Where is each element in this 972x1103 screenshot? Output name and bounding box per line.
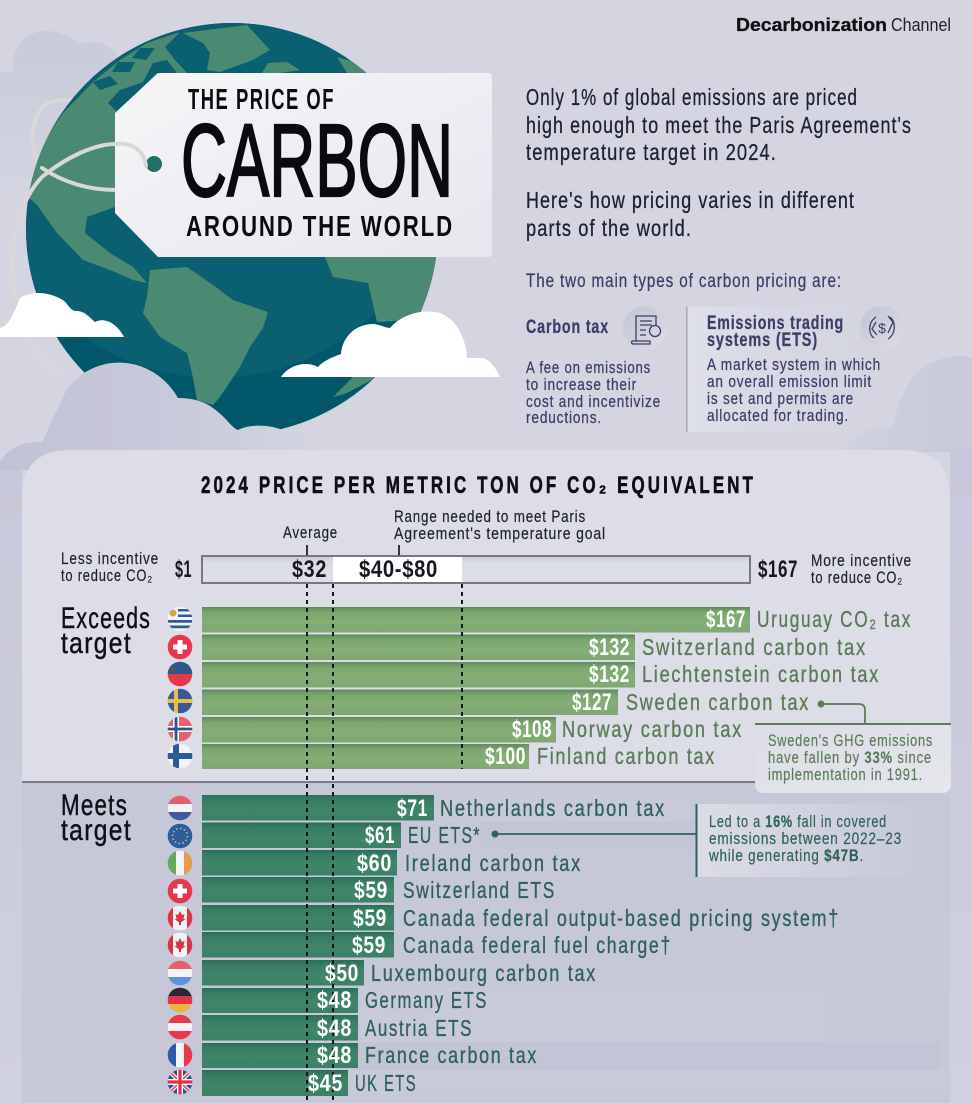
tag hole — [146, 156, 162, 172]
scale bar: to reduce CO₂ — [61, 567, 153, 585]
scale bar: More incentive — [811, 552, 912, 570]
labels: meets target: Switzerland ETS — [403, 877, 556, 903]
callout: EU ETS — [492, 804, 911, 877]
section label: exceeds target: Exceeds — [61, 602, 151, 635]
labels: meets target: EU ETS* — [408, 822, 481, 848]
labels: meets target: Canada federal output-based pricing system† — [403, 905, 840, 931]
scale bar: $167 — [758, 556, 798, 583]
scale bar: $1 — [175, 556, 192, 583]
icon: exchange cycle — [860, 306, 904, 350]
values: exceeds target: $132 — [589, 634, 630, 661]
callout: EU ETS: while generating $47B. — [708, 847, 864, 865]
brand logo: Channel — [891, 15, 951, 35]
land: greenland — [183, 25, 270, 72]
labels: meets target — [355, 795, 840, 1096]
labels: meets target: Canada federal fuel charge† — [403, 932, 672, 958]
brand logo: Decarbonization — [736, 15, 887, 35]
intro text: Only 1% of global emissions are priced — [526, 84, 858, 110]
chart panel — [22, 450, 950, 1103]
land: south america — [143, 267, 268, 405]
labels: exceeds target: Uruguay CO₂ tax — [757, 606, 912, 632]
scale annotations: Range needed to meet Paris — [394, 508, 586, 526]
labels: exceeds target: Switzerland carbon tax — [642, 634, 867, 660]
scale bar: $40-$80 — [359, 556, 438, 583]
scale bar: to reduce CO₂ — [811, 569, 903, 587]
values: meets target — [308, 795, 428, 1097]
section label: exceeds target — [61, 602, 151, 660]
flag: Ireland — [167, 850, 193, 876]
intro text: Here's how pricing varies in different — [526, 187, 855, 213]
flag: Sweden — [167, 688, 193, 714]
scale annotations — [283, 508, 606, 556]
flag: Norway — [167, 716, 193, 742]
flag: Canada — [167, 932, 193, 958]
flag: Canada — [167, 905, 193, 931]
flag: Switzerland — [167, 634, 193, 660]
scale bar — [61, 550, 912, 587]
scale bar: Less incentive — [61, 550, 159, 568]
flag: France — [167, 1042, 193, 1068]
labels: meets target: Ireland carbon tax — [405, 850, 582, 876]
carbon tax title: Carbon tax — [526, 317, 609, 338]
page margins beside chart — [0, 450, 972, 1103]
callout: Sweden: have fallen by 33% since — [768, 749, 932, 767]
ETS title: Emissions trading — [707, 313, 844, 334]
carbon tax description — [526, 359, 661, 427]
flag: UK — [167, 1069, 193, 1095]
cloud: upper left background — [0, 31, 200, 190]
scale annotations: Agreement's temperature goal — [394, 525, 606, 543]
title line one: THE PRICE OF — [188, 84, 335, 116]
scale annotations: Average — [283, 524, 338, 542]
title line three: AROUND THE WORLD — [186, 211, 454, 243]
carbon tax block — [526, 306, 667, 427]
land: europe — [337, 57, 367, 73]
carbon tax description: reductions. — [526, 409, 602, 427]
flags: meets target — [167, 795, 193, 1095]
land: north america — [30, 32, 187, 283]
intro text: temperature target in 2024. — [526, 139, 777, 165]
labels: meets target: Netherlands carbon tax — [440, 795, 666, 821]
labels: meets target: France carbon tax — [365, 1042, 538, 1068]
flag: Austria — [167, 1014, 193, 1040]
ETS description: A market system in which — [707, 356, 881, 374]
intro text: parts of the world. — [526, 215, 692, 241]
values: exceeds target: $100 — [485, 743, 526, 770]
ETS description — [707, 356, 881, 425]
values: meets target: $59 — [353, 905, 387, 932]
cloud: right background — [842, 356, 972, 452]
ETS description: allocated for trading. — [707, 407, 849, 425]
labels: meets target: Germany ETS — [365, 987, 488, 1013]
values: exceeds target: $108 — [512, 716, 552, 743]
section label: meets target: target — [61, 814, 132, 847]
flag: Luxembourg — [167, 960, 193, 986]
flag: EU — [167, 823, 193, 849]
bars: exceeds target — [202, 607, 750, 769]
bars: meets target — [202, 795, 434, 1096]
labels: exceeds target — [537, 606, 912, 769]
ETS block: systems (ETS) — [707, 330, 818, 351]
labels: exceeds target: Finland carbon tax — [537, 743, 716, 769]
values: meets target: $61 — [365, 822, 395, 849]
land: iceland — [262, 62, 300, 73]
carbon tax description: cost and incentivize — [526, 393, 661, 411]
callout: EU ETS: emissions between 2022–23 — [709, 830, 902, 848]
labels: exceeds target: Liechtenstein carbon tax — [642, 661, 880, 687]
labels: exceeds target: Norway carbon tax — [562, 716, 743, 742]
values: exceeds target — [485, 606, 746, 770]
gulf of mexico — [85, 216, 88, 234]
brand logo — [736, 15, 951, 35]
values: meets target: $60 — [357, 850, 392, 877]
values: exceeds target: $167 — [706, 606, 746, 633]
values: meets target: $59 — [354, 877, 388, 904]
labels: meets target: Austria ETS — [365, 1015, 473, 1041]
values: exceeds target: $132 — [589, 661, 630, 688]
callout connector — [492, 831, 696, 837]
values: meets target: $48 — [317, 1042, 352, 1069]
values: meets target: $50 — [325, 960, 359, 987]
labels: exceeds target: Sweden carbon tax — [626, 689, 810, 715]
values: meets target: $59 — [352, 932, 386, 959]
tag string front — [12, 144, 118, 377]
flag: Liechtenstein — [167, 661, 193, 687]
flag: Uruguay — [167, 606, 193, 632]
callout: EU ETS: Led to a 16% fall in covered — [709, 813, 887, 831]
flag: Netherlands — [167, 795, 193, 821]
flag: Finland — [167, 743, 193, 769]
ETS block — [686, 306, 904, 432]
labels: meets target: UK ETS — [355, 1070, 417, 1096]
values: meets target: $48 — [317, 1015, 352, 1042]
flags: exceeds target — [167, 606, 193, 769]
values: meets target: $45 — [308, 1070, 343, 1097]
flag: Switzerland — [167, 878, 193, 904]
callout: Sweden — [755, 701, 951, 793]
land: arctic sea inlets — [93, 48, 177, 112]
flag: Germany — [167, 987, 193, 1013]
intro text — [526, 84, 912, 241]
scale bar: $32 — [292, 556, 327, 583]
callout: Sweden: implementation in 1991. — [768, 766, 923, 784]
price tag with title — [115, 73, 492, 257]
tag string behind globe — [32, 100, 70, 168]
cloud: lower purple foreground — [0, 363, 560, 470]
icon: exchange cycle: $ — [878, 320, 886, 336]
reference lines — [307, 584, 462, 1103]
values: meets target: $71 — [397, 795, 428, 822]
section label: meets target: Meets — [61, 789, 128, 822]
section divider — [22, 781, 756, 783]
carbon tax description: to increase their — [526, 376, 637, 394]
values: exceeds target: $127 — [572, 689, 612, 716]
ETS description: an overall emission limit — [707, 373, 872, 391]
land: southern tip — [333, 377, 377, 397]
title main word: CARBON — [181, 103, 453, 218]
globe illustration — [26, 23, 436, 430]
land: africa — [325, 257, 438, 322]
white cloud left — [0, 293, 124, 337]
callout connector — [818, 701, 865, 724]
values: meets target: $48 — [317, 987, 352, 1014]
carbon tax description: A fee on emissions — [526, 359, 651, 377]
white cloud right — [281, 311, 500, 377]
icon: tax document — [623, 306, 667, 350]
labels: meets target: Luxembourg carbon tax — [371, 960, 597, 986]
ETS description: is set and permits are — [707, 390, 854, 408]
section label: meets target — [61, 789, 132, 847]
section label: exceeds target: target — [61, 627, 132, 660]
chart title: 2024 PRICE PER METRIC TON OF CO₂ EQUIVALENT — [201, 472, 756, 499]
pricing types heading: The two main types of carbon pricing are: — [526, 271, 842, 292]
